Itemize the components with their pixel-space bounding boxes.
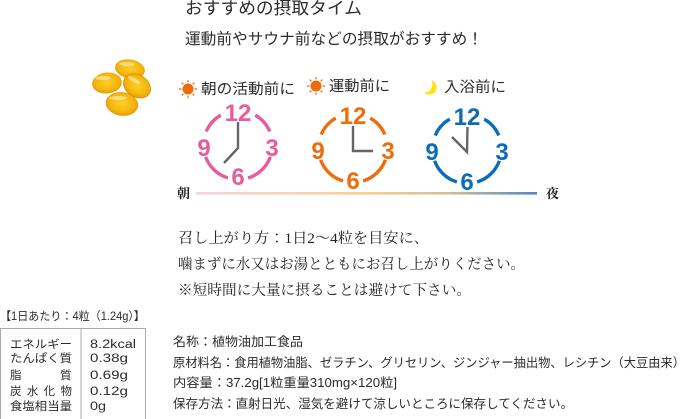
clock: pre-workout 3 o'clock: 12 <box>340 103 366 130</box>
timeline morning to night: 夜 <box>546 186 559 201</box>
product details: 名称：植物油加工食品 <box>173 334 303 349</box>
before bath label <box>424 79 506 96</box>
nutrition table: 0.12g <box>90 386 128 398</box>
clock: morning 7 o'clock <box>197 100 279 191</box>
nutrition table: 0g <box>90 401 106 413</box>
timeline morning to night <box>177 186 559 201</box>
nutrition table: 食塩相当量 <box>10 399 72 413</box>
product details: 内容量：37.2g[1粒重量310mg×120粒] <box>173 375 397 390</box>
product details: 保存方法：直射日光、湿気を避けて涼しいところに保存してください。 <box>173 396 573 411</box>
nutrition table: 0.38g <box>90 353 128 365</box>
clock: before bath 10 o'clock: 9 <box>425 139 439 166</box>
product details: 原材料名：食用植物油脂、ゼラチン、グリセリン、ジンジャー抽出物、レシチン（大豆由来） <box>173 355 685 370</box>
icon: softgel capsules <box>91 57 155 118</box>
clock: before bath 10 o'clock: 3 <box>495 139 509 166</box>
clock: before bath 10 o'clock <box>425 104 509 196</box>
nutrition table: 8.2kcal <box>90 339 136 351</box>
nutrition table: 脂 <box>10 368 22 382</box>
pre-workout label: 運動前に <box>329 78 390 95</box>
nutrition table: 0.69g <box>90 370 128 382</box>
clock: before bath 10 o'clock: 12 <box>454 104 480 131</box>
directions text: 噛まずに水又はお湯とともにお召し上がりください。 <box>178 256 525 273</box>
nutrition table: エネルギー <box>10 338 72 351</box>
nutrition table: たんぱく質 <box>10 351 72 365</box>
subtitle: 運動前やサウナ前などの摂取がおすすめ！ <box>185 30 483 48</box>
directions text: ※短時間に大量に摂ることは避けて下さい。 <box>178 281 471 299</box>
nutrition table <box>0 328 146 419</box>
clock: morning 7 o'clock: 9 <box>197 135 211 162</box>
clock: pre-workout 3 o'clock <box>311 103 395 195</box>
morning label <box>179 80 295 98</box>
clock: before bath 10 o'clock: 6 <box>460 169 474 196</box>
clock: pre-workout 3 o'clock: 6 <box>346 168 360 195</box>
icon: sun <box>179 80 197 98</box>
nutrition table: 炭 水 化 物 <box>10 384 72 398</box>
morning label: 朝の活動前に <box>201 81 295 98</box>
clock: pre-workout 3 o'clock: 3 <box>381 138 395 165</box>
icon: crescent moon <box>424 80 437 95</box>
directions text: 召し上がり方：1日2～4粒を目安に、 <box>178 229 429 247</box>
timeline morning to night: 朝 <box>177 186 190 201</box>
nutrition heading: 【1日あたり：4粒（1.24g）】 <box>0 309 145 323</box>
product details <box>173 334 685 411</box>
directions text <box>178 229 525 299</box>
icon: sun <box>307 77 325 95</box>
nutrition table: 質 <box>60 368 72 382</box>
clock: morning 7 o'clock: 3 <box>265 135 279 162</box>
clock: pre-workout 3 o'clock: 9 <box>311 138 325 165</box>
clock: morning 7 o'clock: 6 <box>231 164 245 191</box>
clock: morning 7 o'clock: 12 <box>225 100 251 127</box>
pre-workout label <box>307 77 390 95</box>
before bath label: 入浴前に <box>444 79 506 96</box>
